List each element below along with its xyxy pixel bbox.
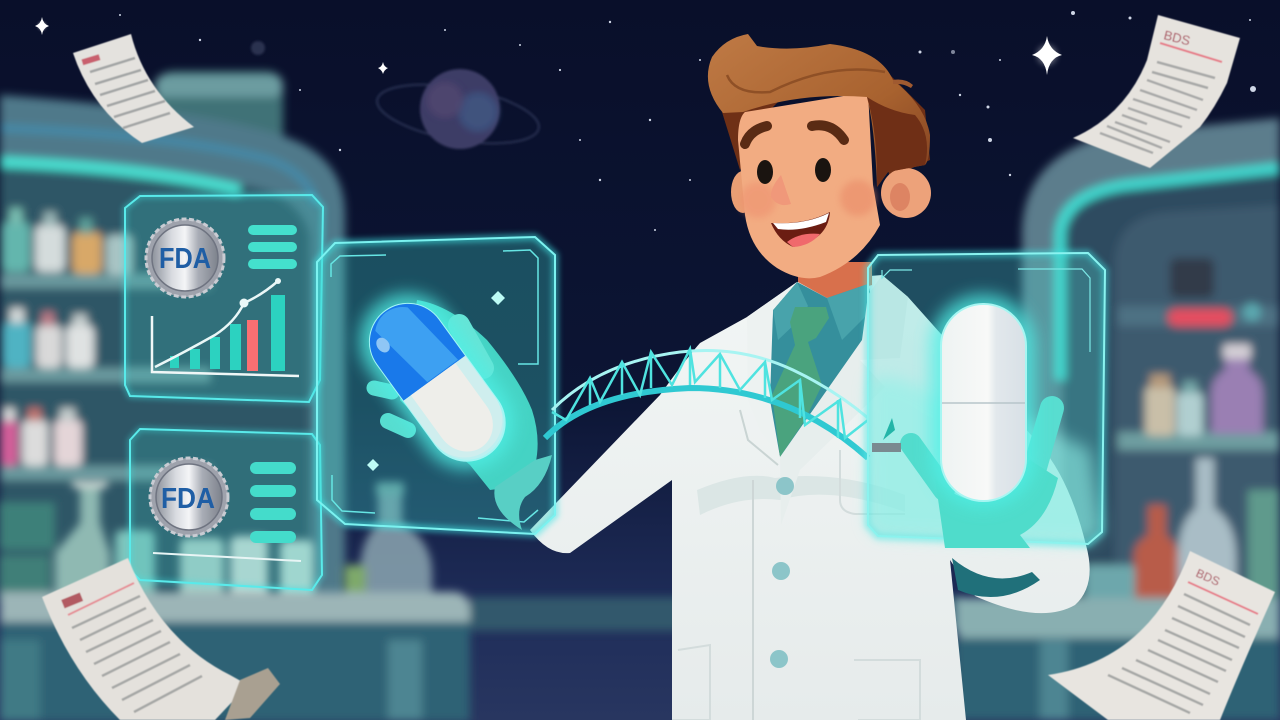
nose xyxy=(771,175,791,205)
capsule: white xyxy=(930,294,1036,508)
bridge between pills xyxy=(545,349,868,458)
hair back xyxy=(722,75,930,178)
coat shading xyxy=(697,476,905,515)
document: top-right floating xyxy=(1073,15,1240,168)
shirt xyxy=(770,282,874,457)
document: lower-right floating xyxy=(1048,551,1275,720)
face xyxy=(738,92,880,278)
panel: lower-left FDA hologram xyxy=(130,429,322,590)
ears xyxy=(731,171,755,213)
document: lower-left floating xyxy=(42,558,280,720)
panel: white capsule hologram xyxy=(868,253,1105,548)
icon: sparkles xyxy=(367,291,505,471)
hand holding capsule xyxy=(911,408,1058,548)
eyes xyxy=(757,160,773,184)
pockets and buttons xyxy=(672,450,920,720)
tie xyxy=(772,307,829,457)
shelf bottles xyxy=(0,208,132,466)
left cabinet xyxy=(0,71,345,600)
right cabinet xyxy=(955,118,1280,720)
neck xyxy=(798,262,872,298)
icon: FDA seal: FDA xyxy=(159,243,211,275)
icon: FDA seal xyxy=(146,219,224,297)
wrist band xyxy=(872,443,901,452)
stars xyxy=(119,11,1256,231)
coat xyxy=(530,275,1090,720)
document: top-right floating: BDS xyxy=(1162,27,1192,48)
eyebrows xyxy=(745,126,767,144)
icon: FDA seal: FDA xyxy=(161,483,215,515)
document: lower-right floating: BDS xyxy=(1194,566,1222,589)
panel: top-left FDA chart hologram xyxy=(125,195,323,402)
glow inside lower panel xyxy=(868,378,1102,544)
left counter with glassware xyxy=(0,480,960,720)
document: top-left floating xyxy=(73,34,194,143)
hand holding capsule xyxy=(374,300,552,530)
planet with ring xyxy=(373,69,543,154)
lapels xyxy=(747,282,797,457)
hair front xyxy=(708,34,930,187)
text placeholder bars xyxy=(250,462,296,543)
scientist xyxy=(530,34,1090,720)
bar chart xyxy=(152,278,299,376)
icon: sparkle stars xyxy=(35,17,1062,75)
icon: FDA seal xyxy=(150,458,228,536)
panel: blue capsule hologram xyxy=(317,237,555,534)
text placeholder bars xyxy=(248,225,297,269)
capsule: blue and white xyxy=(340,274,533,489)
mouth xyxy=(771,212,830,247)
